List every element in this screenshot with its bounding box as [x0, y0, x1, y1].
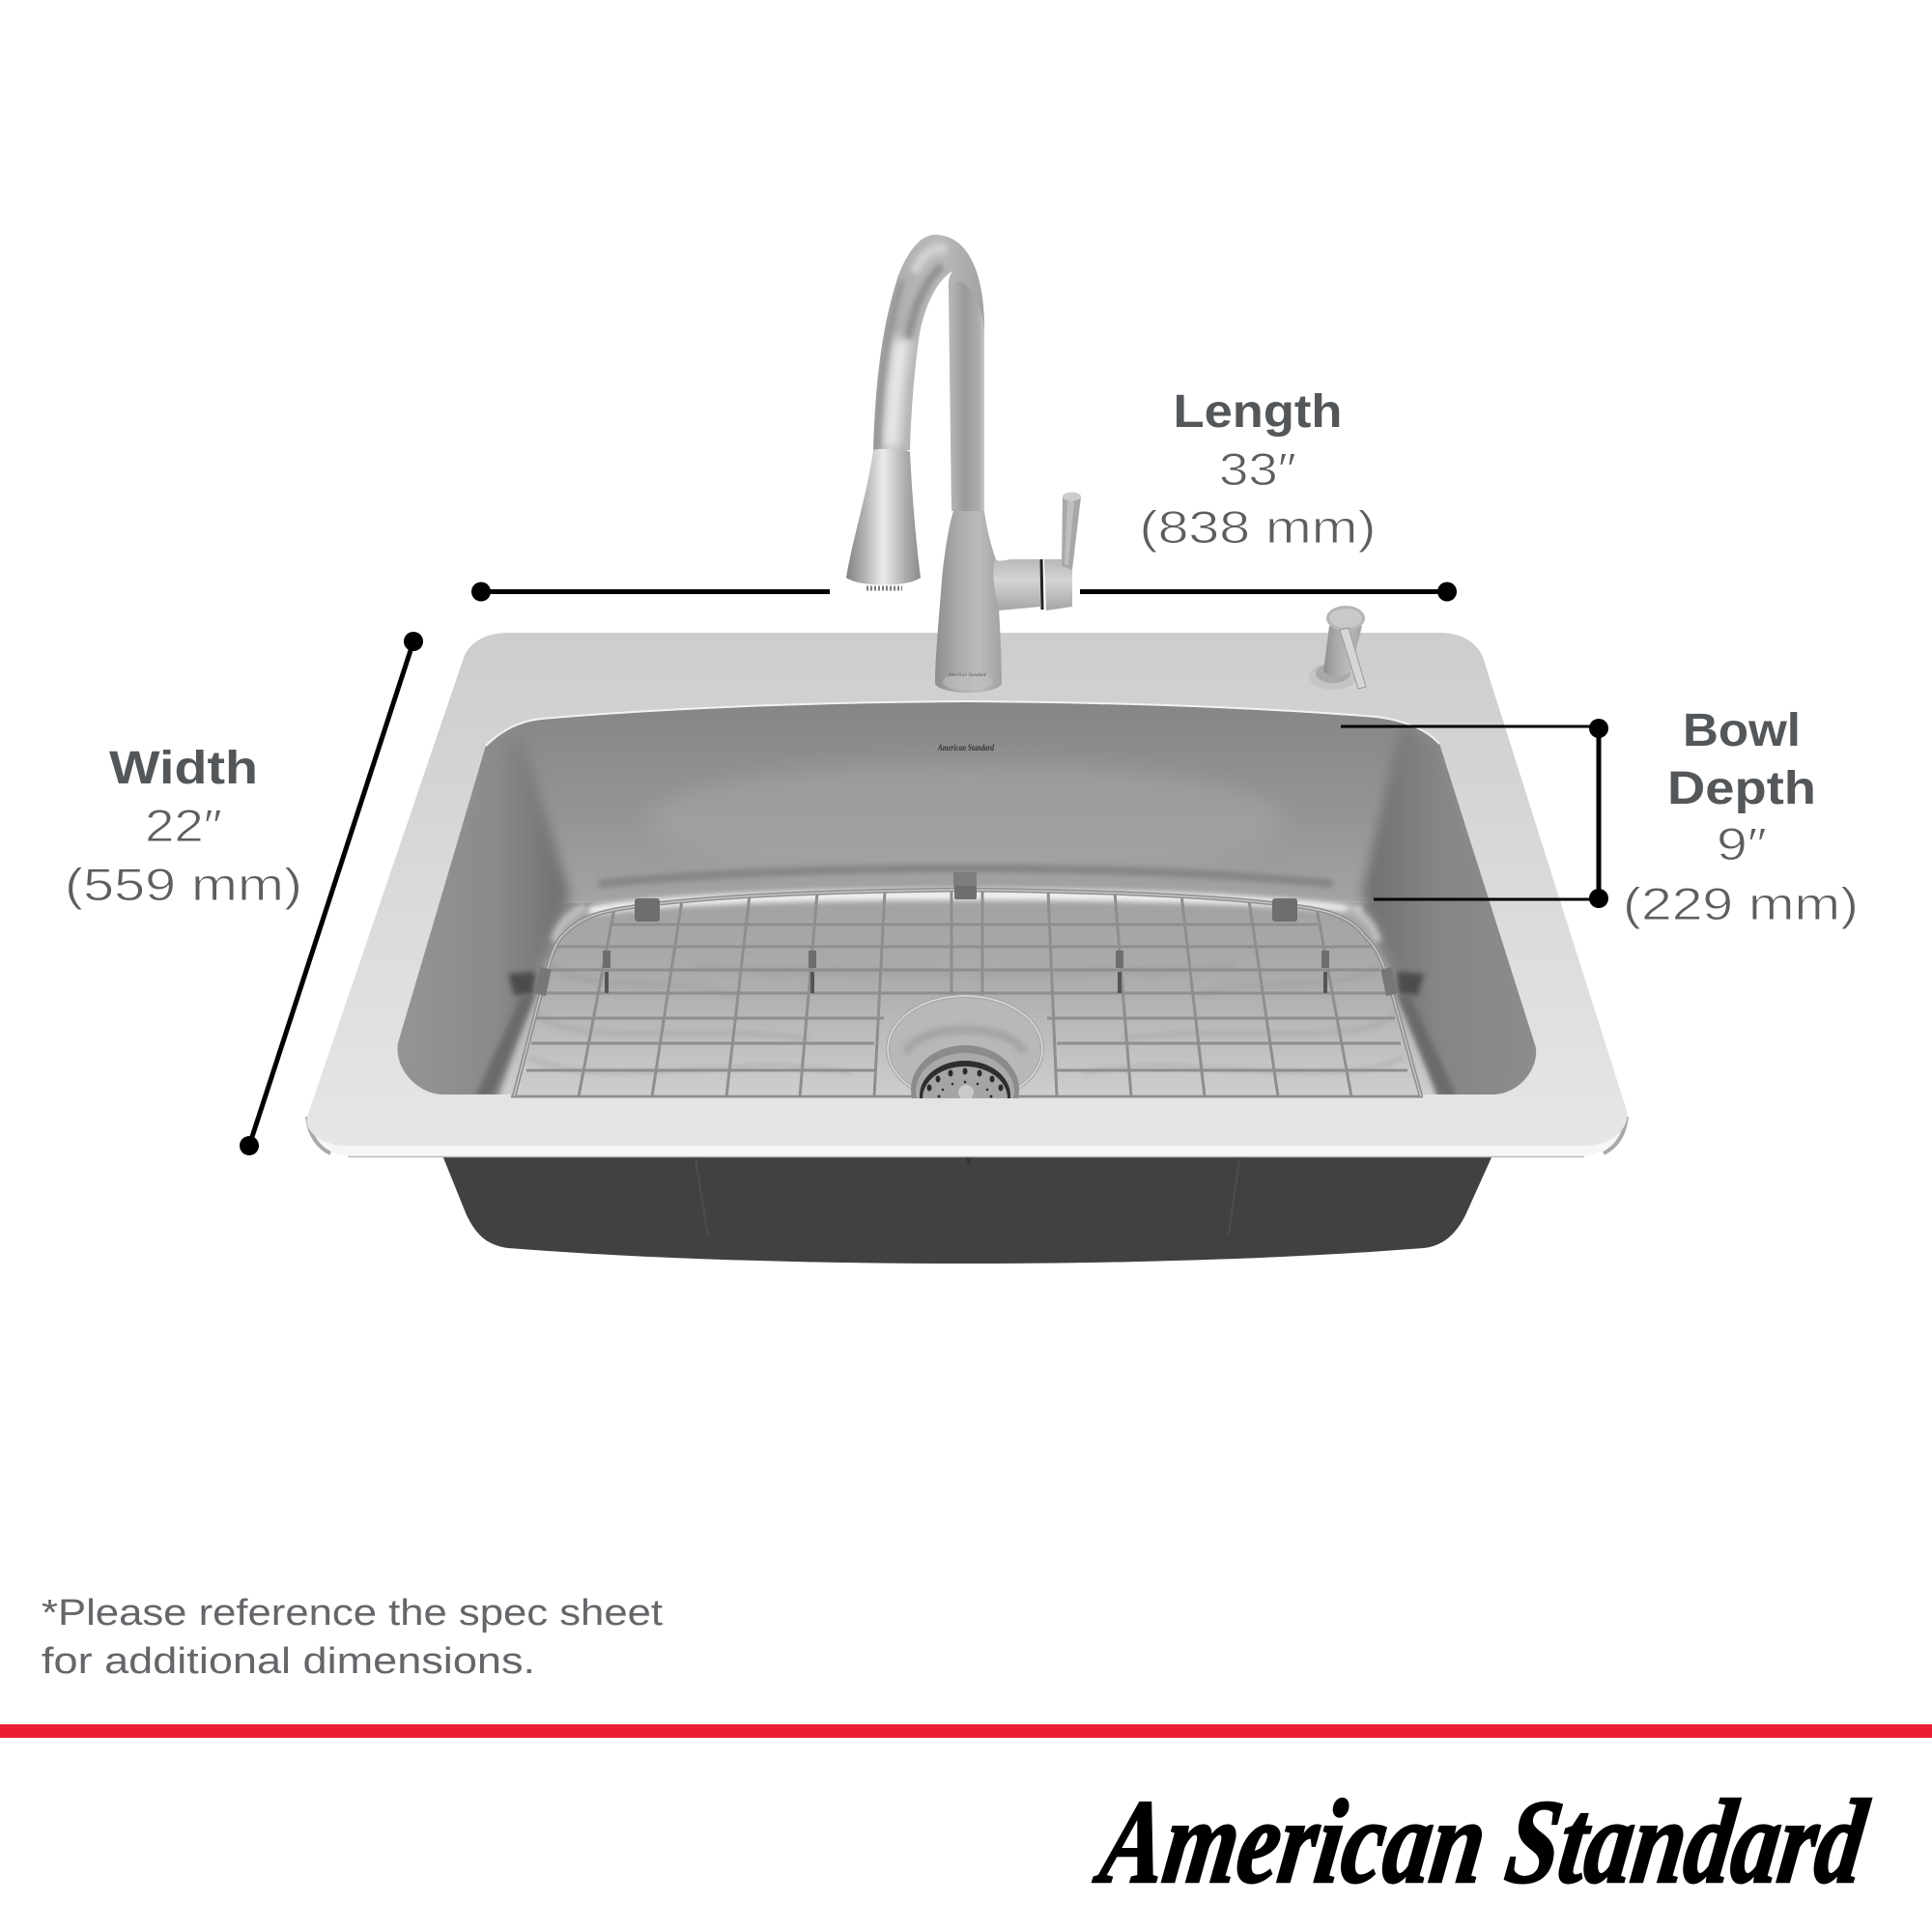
label: length: 33″ [1219, 443, 1296, 495]
label: length [1140, 386, 1376, 553]
wall and floor highlights [554, 889, 1378, 942]
sink basin underside [442, 1155, 1492, 1264]
bowl right wall [1362, 724, 1546, 1101]
label: bowl depth: 9″ [1717, 818, 1767, 869]
faucet: American Standard [948, 673, 986, 678]
bottom grid rack [511, 872, 1423, 1096]
dimension line: bowl depth [1341, 719, 1608, 908]
rack bumpers [534, 872, 1398, 996]
footnote: for additional dimensions. [42, 1641, 535, 1682]
label: bowl depth: Bowl [1683, 705, 1801, 756]
back wall shadow ledge [599, 868, 1333, 884]
footnote [42, 1593, 664, 1682]
label: width: (559 mm) [65, 859, 302, 910]
label: bowl depth: (229 mm) [1623, 878, 1859, 929]
dark clips on walls [508, 972, 535, 995]
faucet [846, 235, 1081, 693]
faucet spray head [846, 449, 921, 588]
faucet lever [1062, 497, 1081, 570]
wire reflections [531, 1020, 1401, 1074]
drain and strainer [886, 994, 1044, 1098]
dimension line: width [240, 632, 423, 1155]
engraved bowl logo: American Standard [937, 743, 994, 753]
label: length: (838 mm) [1140, 501, 1376, 553]
sink illustration [306, 235, 1628, 1264]
rack frame [514, 890, 1421, 1096]
label: width: Width [109, 743, 258, 794]
strainer holes [927, 1068, 1003, 1097]
rack wires [511, 890, 1423, 1096]
label: bowl depth: Depth [1667, 763, 1816, 814]
label: bowl depth [1623, 705, 1859, 929]
faucet spout and hose [873, 235, 984, 511]
label: width [65, 743, 302, 910]
bowl floor [497, 903, 1439, 1094]
faucet body [935, 511, 1002, 693]
label: length: Length [1173, 386, 1343, 438]
dimension line: length [471, 582, 1457, 601]
sink bowl [386, 696, 1546, 1101]
faucet handle hub [993, 559, 1040, 611]
bowl back wall [464, 696, 1468, 903]
red divider bar [0, 1724, 1932, 1738]
soap dispenser [1309, 606, 1366, 690]
sink rim deck [306, 633, 1628, 1157]
footnote: *Please reference the spec sheet [42, 1593, 664, 1634]
label: width: 22″ [145, 800, 222, 851]
bowl left wall [386, 734, 570, 1101]
